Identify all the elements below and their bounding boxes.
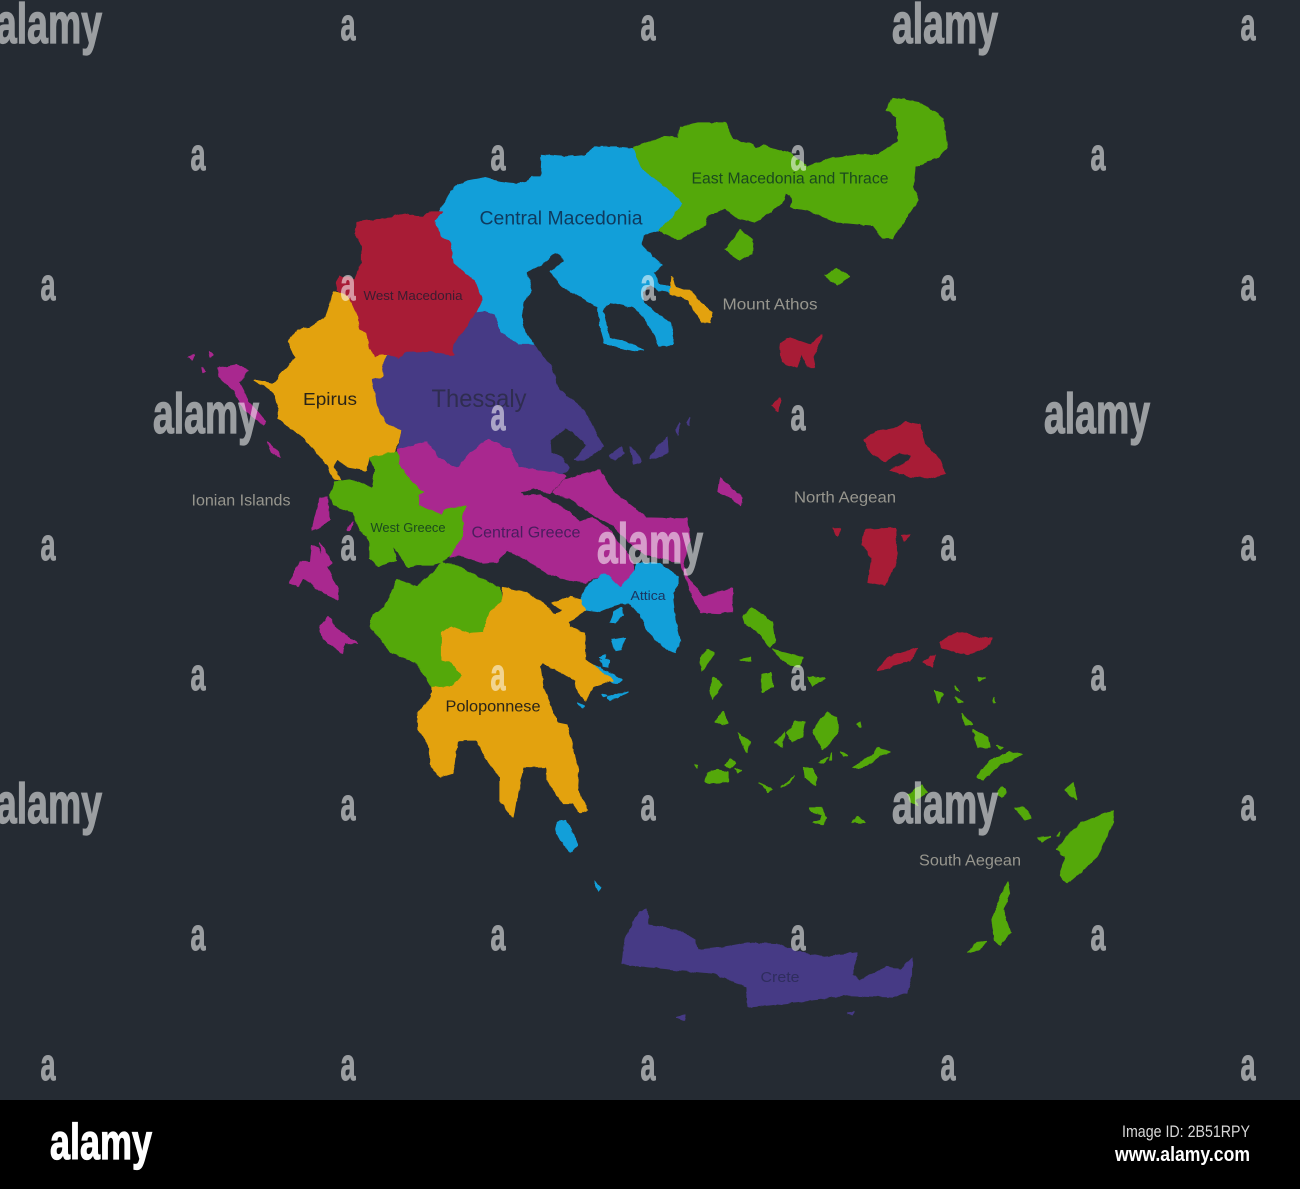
watermarks: a [790, 389, 806, 440]
footer logo: alamy [50, 1114, 152, 1170]
region: Central Macedonia [434, 147, 683, 351]
region: Peloponnese west (green) [370, 563, 502, 688]
label: Central Macedonia: Central Macedonia [480, 208, 643, 230]
region: North Aegean [772, 335, 992, 670]
watermarks: a [490, 909, 506, 960]
region: West Macedonia [337, 212, 482, 360]
watermarks: a [490, 389, 506, 440]
image id: Image ID: 2B51RPY [1122, 1122, 1250, 1141]
region: Central Greece [398, 440, 742, 613]
watermarks: a [1090, 129, 1106, 180]
label: Mount Athos: Mount Athos [722, 296, 818, 314]
label: North Aegean: North Aegean [794, 490, 896, 506]
Mount Athos [670, 277, 712, 322]
label: Epirus: Epirus [303, 389, 357, 409]
region labels [192, 170, 1021, 986]
label: Peloponnese: Poloponnese [446, 698, 540, 716]
label: Ionian Islands: Ionian Islands [192, 492, 291, 510]
watermarks: a [940, 519, 956, 570]
map of Greece [188, 98, 1113, 1020]
watermarks: a [1090, 909, 1106, 960]
region: West Greece [330, 452, 465, 567]
watermarks: a [1240, 779, 1256, 830]
watermarks: a [640, 779, 656, 830]
watermarks: a [340, 259, 356, 310]
watermarks: a [490, 129, 506, 180]
region: East Macedonia and Thrace [633, 98, 947, 285]
watermarks: alamy [892, 772, 998, 836]
watermarks: a [640, 1039, 656, 1090]
watermarks: a [790, 129, 806, 180]
watermarks: alamy [153, 382, 259, 446]
watermarks: a [190, 129, 206, 180]
watermarks: a [1090, 649, 1106, 700]
watermarks: a [940, 1039, 956, 1090]
watermarks: a [340, 779, 356, 830]
label: South Aegean: South Aegean [919, 852, 1021, 870]
watermarks: a [190, 649, 206, 700]
watermarks: a [1240, 1039, 1256, 1090]
watermarks: a [190, 909, 206, 960]
island: Skyros [718, 478, 742, 505]
watermarks: a [1240, 0, 1256, 50]
region: Crete [622, 909, 912, 1020]
region: Ionian Islands [188, 352, 357, 653]
watermarks: a [40, 259, 56, 310]
region: Thessaly [373, 312, 689, 476]
watermarks: a [1240, 519, 1256, 570]
watermarks: alamy [597, 512, 703, 576]
website: www.alamy.com [1114, 1144, 1250, 1166]
label: East Macedonia and Thrace: East Macedonia and Thrace [692, 170, 888, 188]
watermarks: a [640, 0, 656, 50]
label: West Macedonia: West Macedonia [364, 289, 463, 303]
watermarks: a [1240, 259, 1256, 310]
label: Attica: Attica [630, 589, 666, 603]
watermarks: a [640, 259, 656, 310]
watermarks: a [40, 519, 56, 570]
label: West Greece: West Greece [370, 521, 446, 535]
watermarks: a [40, 1039, 56, 1090]
island: Euboea [553, 470, 732, 613]
region: Attica [556, 563, 680, 891]
watermarks: a [790, 649, 806, 700]
watermarks: a [340, 1039, 356, 1090]
watermarks: alamy [1044, 382, 1150, 446]
watermarks: a [940, 259, 956, 310]
label: Crete: Crete [760, 970, 800, 986]
footer bar [0, 1100, 1300, 1189]
label: Thessaly: Thessaly [432, 385, 527, 413]
watermarks: alamy [0, 772, 102, 836]
region: Peloponnese [418, 277, 712, 817]
watermarks: a [490, 649, 506, 700]
region: South Aegean [695, 608, 1113, 952]
watermarks: a [790, 909, 806, 960]
label: Central Greece: Central Greece [472, 524, 580, 542]
region: Epirus [255, 292, 402, 480]
watermarks: a [340, 519, 356, 570]
watermarks: a [340, 0, 356, 50]
